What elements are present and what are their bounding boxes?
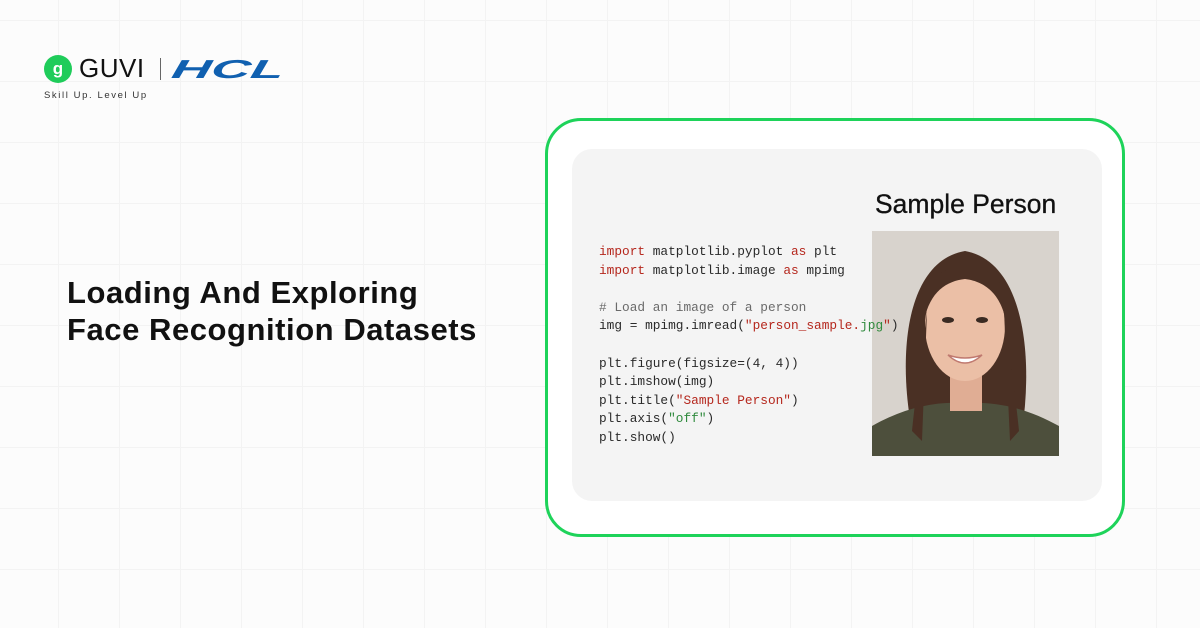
text: HCL: HCL xyxy=(169,54,287,84)
heading: Sample Person: Sample Person xyxy=(875,189,1056,219)
title xyxy=(67,275,477,347)
title: Face Recognition Datasets xyxy=(67,312,477,347)
icon: guvi circle: g xyxy=(53,59,63,78)
icon: guvi circle xyxy=(44,55,72,83)
panel: inner grey xyxy=(572,149,1102,501)
tagline: Skill Up. Level Up xyxy=(44,90,148,101)
title: Loading And Exploring xyxy=(67,275,418,310)
text: GUVI: GUVI xyxy=(79,53,145,83)
image: portrait xyxy=(872,231,1059,456)
code block: import matplotlib.pyplot as plt import matplotlib.image as mpimg # Load an image of a person img = mpimg.imread("person_sample.jpg") plt.figure(figsize=(4, 4)) plt.imshow(img) plt.title("Sample Person") plt.axis("off") plt.show() xyxy=(599,244,899,445)
logo xyxy=(44,53,287,101)
panel: green card xyxy=(545,118,1125,537)
